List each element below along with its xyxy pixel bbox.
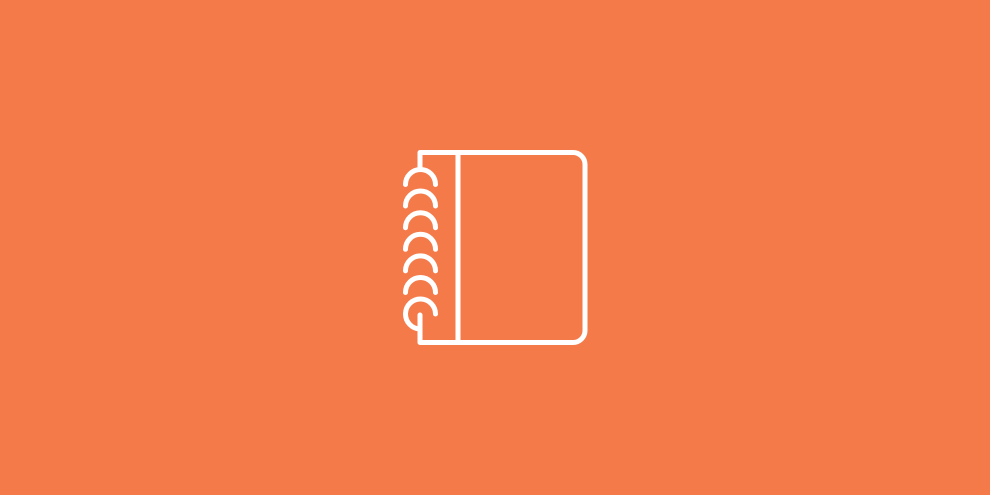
icon: spiral notebook [406, 152, 585, 342]
notebook spine divider [456, 152, 460, 342]
spiral rings [406, 170, 436, 329]
notebook cover outline [420, 152, 585, 342]
